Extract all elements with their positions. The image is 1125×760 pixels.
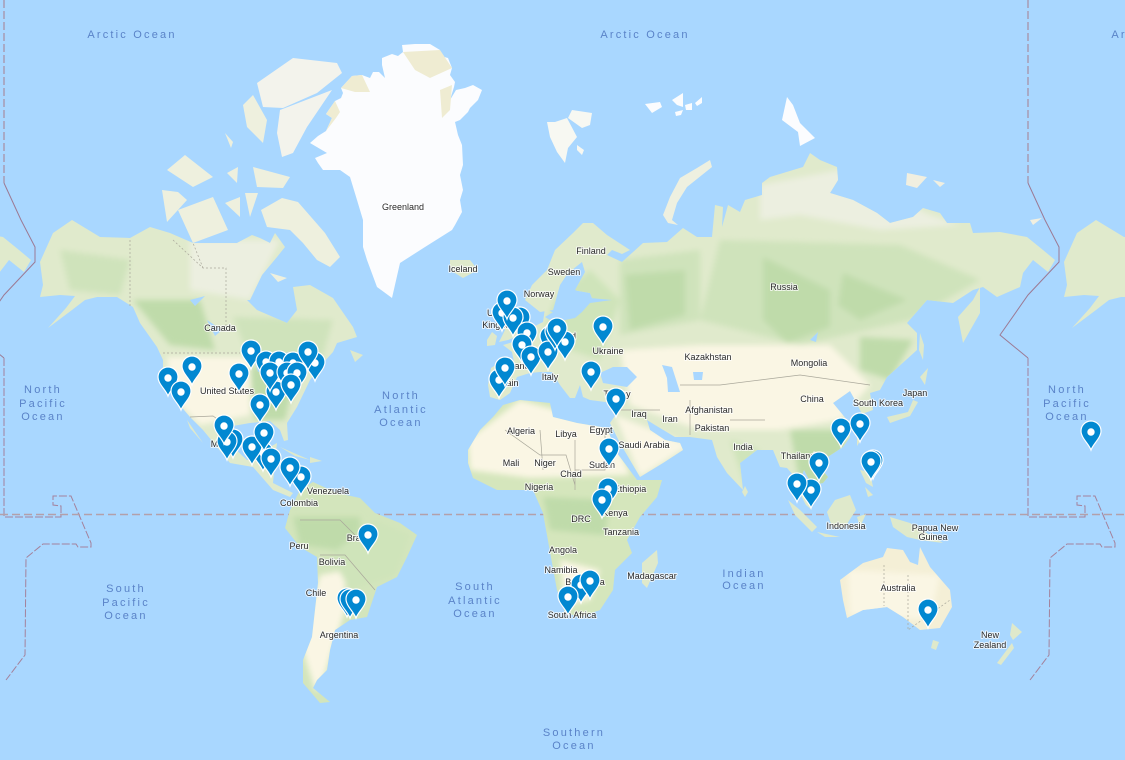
country labels: Norway bbox=[524, 289, 555, 299]
ocean labels: Southern bbox=[543, 727, 605, 739]
Canadian Arctic islands bbox=[162, 95, 340, 282]
country labels: United bbox=[487, 308, 513, 318]
country labels: Nigeria bbox=[525, 482, 553, 492]
country labels: France bbox=[506, 361, 534, 371]
country labels: Saudi Arabia bbox=[618, 440, 670, 450]
Eurasia bbox=[488, 153, 1055, 510]
ocean labels: North bbox=[382, 390, 420, 402]
country labels: Sudan bbox=[589, 460, 615, 470]
country labels: Mali bbox=[503, 458, 519, 468]
Greenland bbox=[310, 44, 482, 298]
country labels: Indonesia bbox=[826, 521, 866, 531]
country labels: Ukraine bbox=[592, 346, 624, 356]
Franz Josef Land bbox=[645, 93, 702, 116]
pins: Asia and Oceania bbox=[787, 413, 1101, 628]
country labels: Italy bbox=[542, 372, 559, 382]
ocean labels: Ocean bbox=[104, 610, 148, 622]
country labels: DRC bbox=[571, 514, 591, 524]
country labels: Chad bbox=[560, 469, 582, 479]
pins: South America bbox=[337, 524, 378, 618]
ocean labels: North bbox=[1048, 384, 1086, 396]
country labels: Finland bbox=[576, 246, 606, 256]
country labels: Ethiopia bbox=[614, 484, 646, 494]
New Siberian and Wrangel islands bbox=[906, 173, 1042, 225]
ocean labels: Indian bbox=[722, 568, 766, 580]
country labels: India bbox=[733, 442, 753, 452]
country labels: Egypt bbox=[589, 425, 613, 435]
Eurasia wrapped on left edge bbox=[0, 153, 31, 510]
country labels: Kingdom bbox=[482, 320, 518, 330]
ocean labels: South bbox=[106, 583, 146, 595]
country labels: Madagascar bbox=[627, 571, 677, 581]
country labels: Niger bbox=[534, 458, 556, 468]
ocean labels: Arctic Ocean bbox=[600, 29, 690, 41]
ocean labels: Pacific bbox=[1043, 398, 1091, 410]
country labels: Turkey bbox=[603, 389, 631, 399]
ocean labels: Ocean bbox=[453, 608, 497, 620]
country labels: South Africa bbox=[548, 610, 596, 620]
country labels: Brazil bbox=[347, 533, 369, 543]
country labels: Algeria bbox=[507, 426, 535, 436]
country labels: Angola bbox=[549, 545, 577, 555]
country labels: Papua New bbox=[912, 523, 959, 533]
country labels: Iraq bbox=[631, 409, 647, 419]
ocean labels: Arctic Ocean bbox=[87, 29, 177, 41]
Severnaya Zemlya bbox=[782, 97, 815, 146]
Australia bbox=[840, 547, 952, 630]
country labels: Mongolia bbox=[791, 358, 827, 368]
country labels: Poland bbox=[548, 331, 576, 341]
ocean labels: Ocean bbox=[379, 417, 423, 429]
northern Ellesmere island bbox=[257, 58, 342, 157]
vegetation shading bbox=[60, 170, 980, 690]
ocean labels: Ocean bbox=[1045, 411, 1089, 423]
country labels: Argentina bbox=[320, 630, 358, 640]
inland seas and lakes bbox=[190, 262, 818, 392]
country labels: Russia bbox=[770, 282, 798, 292]
country labels: Kazakhstan bbox=[684, 352, 732, 362]
Novaya Zemlya bbox=[663, 160, 712, 225]
country labels: New bbox=[981, 630, 999, 640]
North America wrapped on right edge bbox=[1064, 220, 1125, 497]
smaller islands bbox=[187, 260, 1022, 665]
country labels: Chile bbox=[306, 588, 326, 598]
South America bbox=[285, 482, 417, 703]
country labels: Pakistan bbox=[695, 423, 729, 433]
country labels: Australia bbox=[880, 583, 916, 593]
country labels: Tanzania bbox=[603, 527, 639, 537]
country labels: Botswana bbox=[565, 577, 605, 587]
country labels: Kenya bbox=[602, 508, 628, 518]
mid green bbox=[330, 270, 760, 590]
map pins bbox=[158, 290, 1101, 628]
country labels: Sweden bbox=[548, 267, 580, 277]
country labels: Mexico bbox=[211, 439, 239, 449]
country labels: Zealand bbox=[974, 640, 1006, 650]
country labels: Afghanistan bbox=[685, 405, 733, 415]
country labels: Greenland bbox=[382, 202, 424, 212]
ocean labels: Ocean bbox=[552, 740, 596, 752]
country borders bbox=[130, 240, 950, 630]
pins: North America bbox=[158, 340, 325, 495]
country labels bbox=[200, 202, 1006, 650]
country labels: South Korea bbox=[853, 398, 903, 408]
Africa bbox=[468, 400, 662, 617]
country labels: Libya bbox=[555, 429, 577, 439]
deserts and dry regions bbox=[167, 345, 940, 690]
country labels: Venezuela bbox=[307, 486, 349, 496]
country labels: Spain bbox=[495, 378, 519, 388]
ocean labels: Pacific bbox=[102, 597, 150, 609]
ocean labels: Pacific bbox=[19, 398, 67, 410]
country labels: Iran bbox=[662, 414, 678, 424]
ocean labels: Ocean bbox=[21, 411, 65, 423]
forest regions bbox=[60, 240, 980, 365]
ocean labels: North bbox=[24, 384, 62, 396]
Svalbard bbox=[547, 110, 592, 163]
country labels: Bolivia bbox=[319, 557, 345, 567]
tundra and cold regions bbox=[190, 170, 960, 300]
country labels: Namibia bbox=[544, 565, 578, 575]
ocean labels: Atlantic bbox=[374, 404, 428, 416]
country labels: China bbox=[800, 394, 824, 404]
country labels: Iceland bbox=[448, 264, 478, 274]
pins: Africa bbox=[558, 438, 619, 615]
country labels: Peru bbox=[289, 541, 309, 551]
pins: Europe and Middle East bbox=[489, 290, 626, 417]
ocean labels: Atlantic bbox=[448, 595, 502, 607]
Greenland coastal tan bbox=[326, 50, 452, 131]
country labels: Guinea bbox=[918, 532, 948, 542]
North America bbox=[40, 220, 357, 497]
ocean labels: Ocean bbox=[722, 580, 766, 592]
country labels: United States bbox=[200, 386, 255, 396]
country labels: Colombia bbox=[280, 498, 318, 508]
ocean labels: South bbox=[455, 581, 495, 593]
country labels: Thailand bbox=[781, 451, 815, 461]
country labels: Canada bbox=[204, 323, 236, 333]
country labels: Japan bbox=[903, 388, 927, 398]
